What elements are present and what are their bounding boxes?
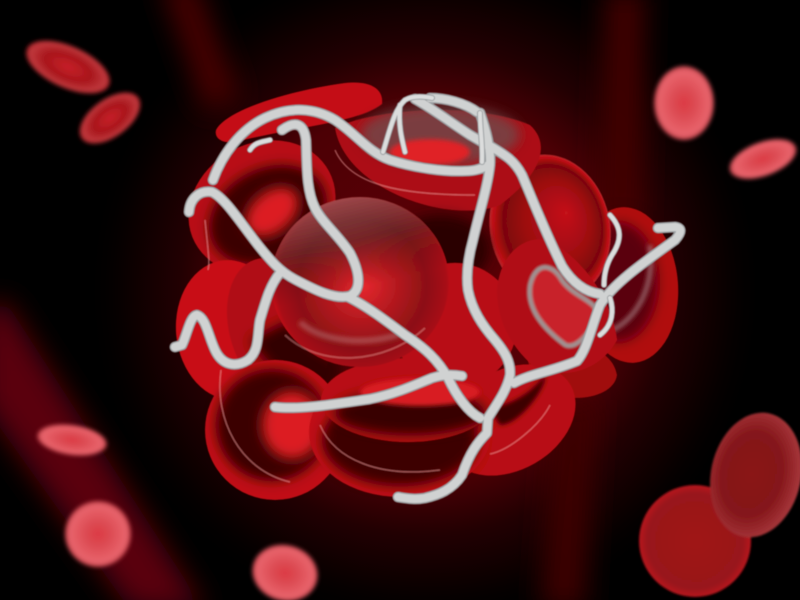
cell: centre right <box>393 263 517 387</box>
blurred blood cells: lower left <box>35 420 324 600</box>
cell: central large <box>271 197 449 367</box>
cell: top centre <box>335 110 541 211</box>
cell: mid left <box>209 245 347 415</box>
fibrin strands <box>175 97 680 499</box>
cell: top crescent <box>216 82 382 142</box>
highlights on cells <box>205 150 550 482</box>
cell: far left <box>170 256 290 404</box>
cell: far right <box>571 203 685 367</box>
cell: lower left <box>205 360 345 500</box>
blurred blood cells: upper left <box>18 30 149 154</box>
cell: heart shaped <box>497 239 617 373</box>
blurred blood cells: upper right <box>654 66 800 187</box>
cell: bottom right <box>424 342 596 498</box>
cell: upper left <box>165 115 359 299</box>
cell: lower right shoulder <box>526 330 617 398</box>
blood cells: lower right pair <box>639 404 800 597</box>
shadow behind centre <box>390 215 490 285</box>
clot: red blood cells <box>165 82 685 500</box>
cell: lower centre <box>309 367 491 497</box>
cell: right <box>476 143 624 313</box>
